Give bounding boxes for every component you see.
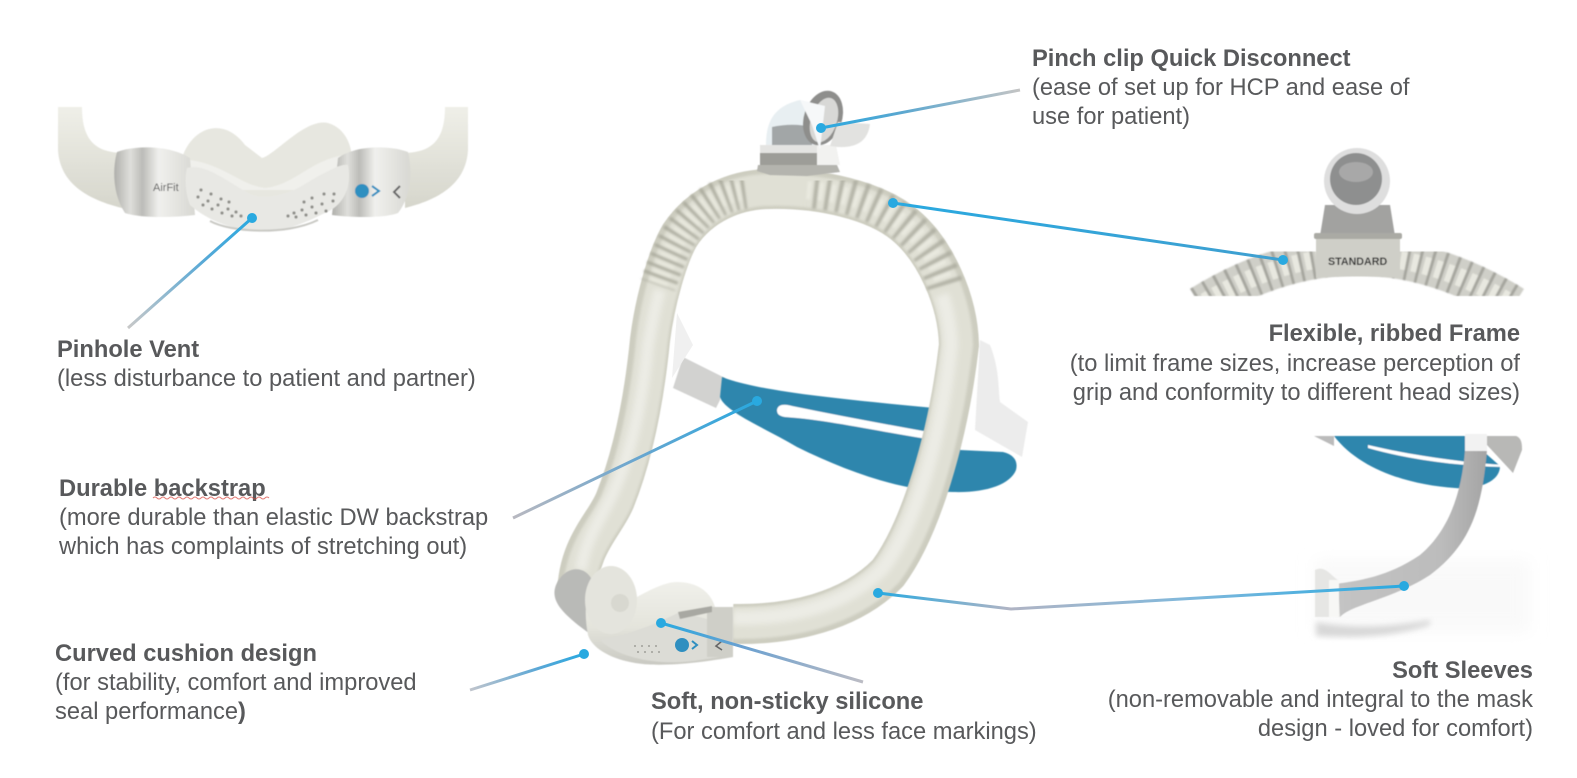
left arm — [58, 107, 122, 208]
text: soft sleeves — [1108, 658, 1533, 742]
STANDARD label: STANDARD — [1328, 256, 1387, 268]
text: durable backstrap: (more durable than elastic DW backstrap — [59, 505, 488, 531]
pinch clip elbow — [757, 85, 870, 176]
callout: silicone leader — [656, 618, 863, 682]
text: soft sleeves: design - loved for comfort) — [1258, 716, 1533, 742]
callout: pinhole vent leader — [128, 213, 257, 328]
left cylinder — [114, 147, 195, 217]
text: curved cushion design: Curved cushion design — [55, 641, 317, 667]
vent dots main — [634, 645, 660, 653]
text: flexible ribbed frame — [1070, 321, 1520, 406]
soft sleeves inset backdrop — [1315, 560, 1530, 632]
size marker M — [675, 638, 689, 652]
frame tube — [577, 189, 959, 624]
connector circle — [1324, 148, 1390, 214]
text: soft non-sticky silicone — [651, 689, 1037, 745]
nose cushion — [183, 123, 352, 200]
right grey tab — [1487, 436, 1522, 473]
right arm — [405, 107, 468, 208]
callout: cushion leader — [470, 649, 589, 690]
backstrap: grey left tab — [673, 357, 725, 408]
standard connector block — [1316, 238, 1400, 278]
under shadow — [1316, 620, 1430, 637]
text: durable backstrap — [58, 476, 488, 560]
bottom right inset: soft sleeve close-up — [1314, 434, 1522, 637]
elbow neck — [1320, 205, 1395, 236]
text: soft non-sticky silicone: (For comfort and less face markings) — [651, 719, 1037, 745]
front vent panel — [186, 165, 349, 231]
text: pinch clip quick disconnect: Pinch clip Quick Disconnect — [1032, 46, 1351, 72]
ribbed section of frame — [658, 190, 945, 285]
text: flexible ribbed frame: Flexible, ribbed Frame — [1269, 321, 1520, 347]
text: durable backstrap: Durable backstrap — [59, 476, 266, 502]
cushion assembly — [554, 566, 733, 665]
backstrap: blue band — [720, 377, 1017, 492]
text: durable backstrap: which has complaints of stretching out) — [58, 534, 467, 560]
sleeve arm — [1335, 450, 1487, 617]
size chevron — [692, 641, 697, 649]
strap slot — [1368, 445, 1503, 467]
text: pinch clip quick disconnect — [1032, 46, 1410, 130]
callout: ribbed frame leader — [888, 198, 1288, 265]
ribbed arc — [1200, 256, 1514, 305]
text: flexible ribbed frame: grip and conformity to different head sizes) — [1073, 380, 1520, 406]
left strap tip — [1314, 436, 1334, 446]
dark chevron — [716, 641, 722, 650]
left headgear tab sliver — [672, 313, 693, 378]
text: soft non-sticky silicone: Soft, non-sticky silicone — [651, 689, 923, 715]
white tube top — [1465, 434, 1487, 451]
vent holes — [196, 188, 336, 219]
left inset: pinhole vent close-up — [58, 107, 468, 231]
right inset: ribbed frame close-up — [1200, 148, 1514, 305]
text: pinch clip quick disconnect: use for patient) — [1032, 104, 1190, 130]
text: curved cushion design — [55, 641, 417, 725]
text: pinch clip quick disconnect: (ease of set up for HCP and ease of — [1032, 75, 1410, 101]
text: pinhole vent — [57, 337, 476, 392]
text: flexible ribbed frame: (to limit frame sizes, increase perception of — [1070, 351, 1520, 377]
text: soft sleeves: Soft Sleeves — [1392, 658, 1533, 684]
text: curved cushion design: (for stability, comfort and improved — [55, 670, 417, 696]
callout: soft sleeve leader — [873, 581, 1409, 609]
callout: backstrap leader — [513, 396, 762, 518]
size marker — [355, 184, 369, 198]
callout: pinch clip leader — [816, 90, 1020, 133]
text: pinhole vent: (less disturbance to patient and partner) — [57, 366, 476, 392]
text: soft sleeves: (non-removable and integral to the mask — [1108, 687, 1533, 713]
chevrons — [372, 186, 379, 196]
text: curved cushion design: seal performance) — [55, 699, 246, 725]
AirFit wordmark: AirFit — [153, 182, 179, 194]
headgear tab right — [975, 340, 1028, 457]
blue strap — [1334, 436, 1500, 488]
clear connector — [1315, 569, 1340, 617]
main mask illustration — [554, 85, 1028, 665]
right cylinder — [332, 147, 410, 217]
text: pinhole vent: Pinhole Vent — [57, 337, 199, 363]
